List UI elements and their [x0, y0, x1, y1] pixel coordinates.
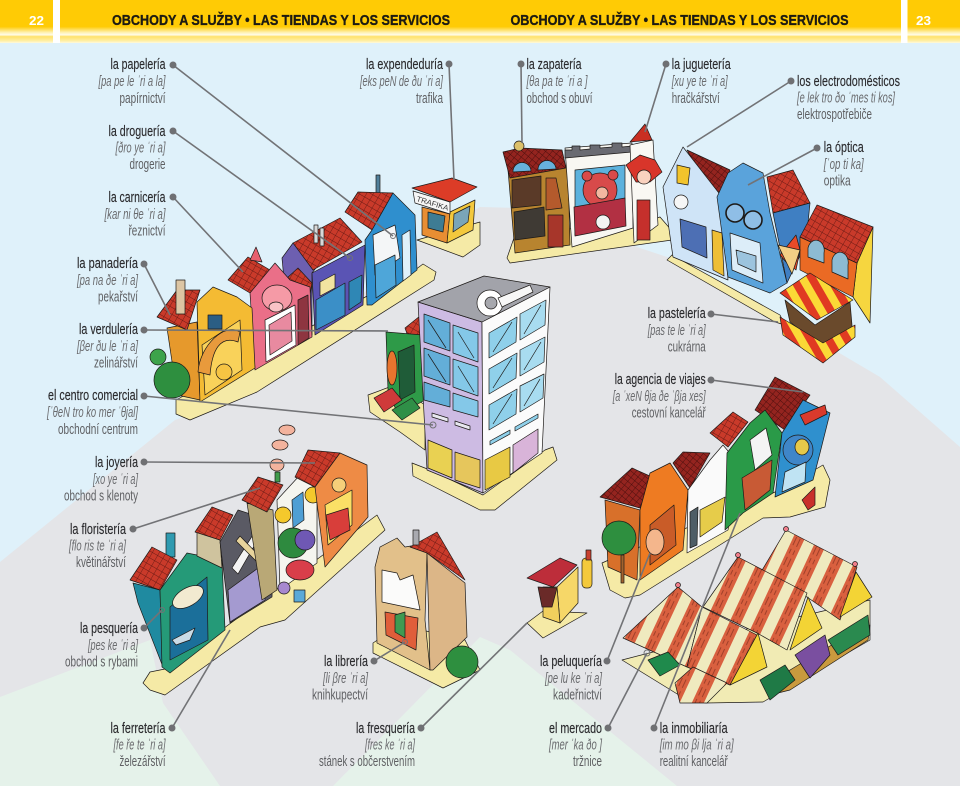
travel white shop — [673, 445, 738, 553]
label: la juguetería: la juguetería — [672, 56, 731, 73]
label: la pastelería: [pas te le ˈri a] — [647, 323, 706, 339]
barber — [600, 463, 688, 583]
label: la óptica: optika — [824, 174, 851, 190]
label: el mercado — [548, 720, 603, 770]
leader line: la ferretería — [168, 630, 230, 732]
fish shop — [130, 533, 225, 673]
label: la agencia de viajes: cestovní kancelář — [632, 406, 706, 422]
label: la joyería — [64, 454, 139, 504]
label: la zapatería — [526, 56, 592, 107]
flowers floating — [270, 425, 295, 482]
label: la papelería — [98, 56, 166, 107]
label: la carnicería: [kar ni θe ˈri a] — [104, 207, 166, 223]
label: la fresquería: stánek s občerstvením — [319, 754, 415, 770]
label: la papelería: la papelería — [110, 56, 166, 73]
leader line: la joyería — [140, 458, 315, 466]
label: la pesquería: [pes ke ˈri a] — [87, 638, 139, 654]
label: la peluquería: [pe lu ke ˈri a] — [544, 671, 603, 687]
label: la librería: [li βre ˈri a] — [322, 671, 369, 687]
label: la joyería: la joyería — [95, 454, 138, 471]
label: la verdulería: [βer ðu le ˈri a] — [76, 339, 139, 355]
label: los electrodomésticos: los electrodomésticos — [797, 73, 900, 90]
label: la floristería: květinářství — [76, 555, 126, 571]
hardware shop — [195, 507, 273, 623]
label: la carnicería: řeznictví — [128, 224, 166, 240]
shoe shop — [503, 141, 570, 253]
label: la juguetería: [xu ye te ˈri a] — [671, 74, 728, 90]
label: la fresquería: [fres ke ˈri a] — [364, 738, 416, 754]
label: la ferretería — [110, 720, 166, 770]
tent back — [758, 530, 857, 620]
label: la agencia de viajes: [a ˈxeN θja ðe ˈβja xes] — [612, 389, 706, 405]
label: el mercado: [mer ˈka ðo ] — [548, 738, 603, 754]
label: el centro comercial: [ˈθeN tro ko mer ˈθjal] — [46, 405, 139, 421]
label: la floristería: la floristería — [70, 521, 126, 538]
leader line: la carnicería — [170, 194, 243, 272]
label: la panadería: la panadería — [77, 255, 138, 272]
tent front — [623, 587, 702, 667]
toy tower and jester — [626, 124, 662, 243]
label: los electrodomésticos — [796, 73, 900, 123]
label: la pesquería — [65, 620, 139, 670]
plaza ground — [0, 207, 960, 786]
label: la verdulería — [76, 321, 139, 372]
shop: drugstore — [282, 218, 365, 345]
label: la inmobiliaría — [659, 720, 734, 770]
label: la ferretería: la ferretería — [110, 720, 166, 737]
leader line: la juguetería — [645, 60, 670, 132]
label: la zapatería: [θa pa te ˈri a ] — [526, 74, 588, 90]
label: los electrodomésticos: [e lek tro ðo ˈmes ti kos] — [796, 90, 896, 106]
label: la papelería: [pa pe le ˈri a la] — [98, 74, 166, 90]
leader line: la librería — [370, 640, 408, 664]
green ground left — [0, 640, 220, 786]
windows purple face — [424, 314, 480, 488]
label: la papelería: papírnictví — [120, 91, 166, 107]
label: la ferretería: železářství — [120, 754, 166, 770]
leader line: la zapatería — [518, 60, 524, 143]
label: la joyería: [xo ye ˈri a] — [92, 472, 139, 488]
leader line: la inmobiliaría — [650, 513, 740, 732]
label: la pesquería: obchod s rybami — [65, 654, 138, 670]
label: la librería: la librería — [324, 653, 368, 670]
label: la fresquería — [319, 720, 416, 770]
label: la carnicería: la carnicería — [108, 189, 166, 206]
leader line: la panadería — [140, 260, 170, 315]
label: el mercado: el mercado — [549, 720, 602, 737]
illustration: street of shops upper left — [150, 175, 436, 420]
illustration: bookshop — [373, 530, 480, 688]
leader line: la verdulería — [140, 326, 388, 334]
title right: OBCHODY A SLUŽBY • LAS TIENDAS Y LOS SERVICIOS — [510, 11, 849, 29]
leader line: la expendeduría — [446, 60, 454, 180]
label: la verdulería: la verdulería — [79, 321, 138, 338]
header band — [0, 0, 960, 43]
logo on roof — [477, 285, 533, 316]
label: la expendeduría: la expendeduría — [366, 56, 443, 73]
leader line: la droguería — [170, 128, 352, 260]
pastry shop — [778, 205, 873, 363]
label: la expendeduría: trafika — [416, 91, 444, 107]
label: la panadería: pekařství — [98, 290, 138, 306]
leader line: el centro comercial — [140, 392, 436, 428]
optician — [717, 163, 810, 293]
label: la expendeduría: [eks peN de ðu ˈri a] — [359, 74, 444, 90]
label: el centro comercial: el centro comercial — [48, 387, 138, 404]
label: la zapatería: obchod s obuví — [526, 91, 592, 107]
jewellery shop — [295, 450, 368, 567]
label: la panadería: [pa na ðe ˈri a] — [76, 273, 139, 289]
label: la inmobiliaría: [im mo βi lja ˈri a] — [659, 738, 734, 754]
windows white face — [485, 300, 546, 490]
florist — [242, 475, 321, 602]
label: la librería — [312, 653, 369, 704]
label: la inmobiliaría: la inmobiliaría — [660, 720, 728, 737]
label: la óptica — [823, 139, 864, 190]
illustration: shopping centre — [368, 276, 557, 510]
label: la droguería: drogerie — [130, 157, 166, 173]
label: la panadería — [76, 255, 139, 306]
shop: butcher — [228, 247, 312, 370]
label: la droguería: la droguería — [108, 123, 166, 140]
label: la peluquería — [540, 653, 603, 704]
label: la agencia de viajes — [612, 371, 706, 422]
label: la pastelería — [647, 305, 706, 356]
green ground centre — [333, 637, 677, 786]
illustration: street of shops lower left — [130, 450, 385, 695]
label: la verdulería: zelinářství — [94, 356, 138, 372]
green shop — [710, 377, 810, 530]
label: la zapatería: la zapatería — [526, 56, 582, 73]
illustration: fresh food kiosk — [527, 550, 592, 638]
label: la inmobiliaría: realitní kancelář — [660, 754, 728, 770]
label: la óptica: [ˈop ti ka] — [823, 157, 864, 173]
shop: stationery — [345, 175, 417, 305]
illustration: travel agency street — [600, 377, 830, 598]
page number 23: 23 — [916, 13, 931, 28]
leader line: la agencia de viajes — [708, 376, 803, 392]
appliance shop — [663, 147, 730, 280]
illustration: shoe and toy shops — [503, 124, 673, 263]
label: la joyería: obchod s klenoty — [64, 488, 139, 504]
label: la juguetería — [671, 56, 731, 107]
illustration: appliance, optician and pastry shops — [663, 147, 873, 363]
tree — [150, 349, 190, 398]
title left: OBCHODY A SLUŽBY • LAS TIENDAS Y LOS SERVICIOS — [112, 11, 450, 29]
greengrocer — [374, 316, 425, 420]
label: la agencia de viajes: la agencia de viajes — [615, 371, 706, 388]
leader line: el mercado — [604, 650, 650, 732]
tent middle — [703, 557, 807, 650]
toy shop — [565, 143, 633, 247]
label: la peluquería: kadeřnictví — [553, 688, 602, 704]
illustration: market tents — [622, 526, 872, 703]
leader line: la peluquería — [604, 553, 650, 664]
leader line: la fresquería — [418, 623, 527, 732]
label: el centro comercial: obchodní centrum — [58, 422, 138, 438]
label: el centro comercial — [46, 387, 139, 438]
leader line: la pesquería — [140, 608, 164, 632]
label: la peluquería: la peluquería — [540, 653, 602, 670]
label: la pastelería: cukrárna — [668, 340, 706, 356]
label: la óptica: la óptica — [824, 139, 864, 156]
label: la carnicería — [104, 189, 166, 240]
shop: bakery — [157, 280, 255, 402]
label: la floristería: [flo ris te ˈri a] — [68, 538, 127, 554]
label: la pastelería: la pastelería — [648, 305, 706, 322]
label: la ferretería: [fe ře te ˈri a] — [113, 738, 166, 754]
label: la librería: knihkupectví — [312, 688, 368, 704]
label: el mercado: tržnice — [573, 754, 602, 770]
label: la floristería — [68, 521, 127, 571]
leader line: la pastelería — [708, 310, 778, 322]
label: la fresquería: la fresquería — [356, 720, 415, 737]
leader line: la óptica — [748, 144, 820, 185]
leader line: la floristería — [130, 488, 260, 532]
kiosk sign: TRAFIKA — [415, 194, 450, 213]
label: la pesquería: la pesquería — [80, 620, 138, 637]
leader line: la papelería — [170, 62, 396, 238]
blue shop with globe — [775, 400, 830, 510]
label: la droguería: [ðro ye ˈri a] — [115, 140, 166, 156]
page number 22: 22 — [29, 13, 44, 28]
leader line: los electrodomésticos — [687, 78, 794, 147]
label: la juguetería: hračkářství — [672, 91, 720, 107]
illustration: tobacco kiosk — [412, 178, 480, 257]
label: los electrodomésticos: elektrospotřebiče — [797, 107, 872, 123]
label: la droguería — [108, 123, 166, 173]
label: la expendeduría — [359, 56, 444, 107]
